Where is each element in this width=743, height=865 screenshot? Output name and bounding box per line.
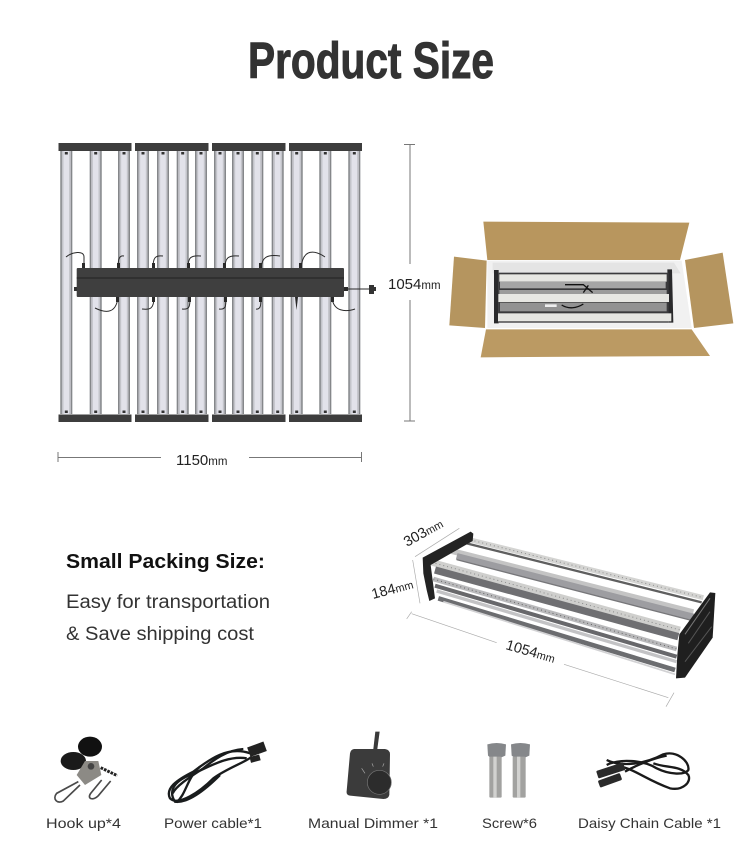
caption: power cable: Power cable*1 xyxy=(164,815,262,831)
dimension lines xyxy=(407,528,674,707)
packed bars xyxy=(498,273,671,323)
rails xyxy=(432,539,703,674)
left end bracket xyxy=(423,532,473,601)
power plug xyxy=(369,285,376,294)
icon: manual dimmer xyxy=(347,732,391,799)
bottom mounting rail xyxy=(58,414,362,422)
product diagram: LED fixture top view xyxy=(58,143,376,422)
dimension label: 303mm: 303mm xyxy=(401,516,446,550)
icon: hook up xyxy=(55,737,117,802)
width dimension: 1150mm xyxy=(58,452,362,469)
folded fixture 3D view xyxy=(407,528,715,707)
caption: daisy chain cable: Daisy Chain Cable *1 xyxy=(578,815,721,831)
width dimension: 1150mm: 1150mm xyxy=(176,452,227,469)
icon: power cable xyxy=(169,742,267,802)
carton flaps xyxy=(449,222,733,357)
text: save shipping cost: & Save shipping cost xyxy=(66,624,255,645)
text: easy for transportation: Easy for transportation xyxy=(66,592,270,613)
top mounting rail xyxy=(58,143,362,151)
connectors xyxy=(82,263,348,310)
foam liner xyxy=(487,261,692,328)
connection wires xyxy=(66,252,370,311)
right end bracket xyxy=(676,592,715,678)
caption: screw: Screw*6 xyxy=(482,815,537,831)
light bars xyxy=(60,151,360,414)
driver housing xyxy=(74,268,344,297)
height dimension: 1054mm: 1054mm xyxy=(388,276,441,293)
packaged product in open carton xyxy=(449,222,733,357)
dimension label: 184mm: 184mm xyxy=(370,576,415,603)
height dimension: 1054mm xyxy=(388,144,441,421)
heading: small packing size: Small Packing Size: xyxy=(66,551,265,573)
icon: screws xyxy=(487,743,530,798)
caption: manual dimmer: Manual Dimmer *1 xyxy=(308,815,438,831)
icon: daisy chain cable xyxy=(596,753,689,789)
caption: hook up: Hook up*4 xyxy=(46,815,121,831)
title: Product Size xyxy=(248,32,494,89)
dimension label: 1054mm: 1054mm xyxy=(504,637,557,667)
dark end brackets xyxy=(494,269,673,323)
